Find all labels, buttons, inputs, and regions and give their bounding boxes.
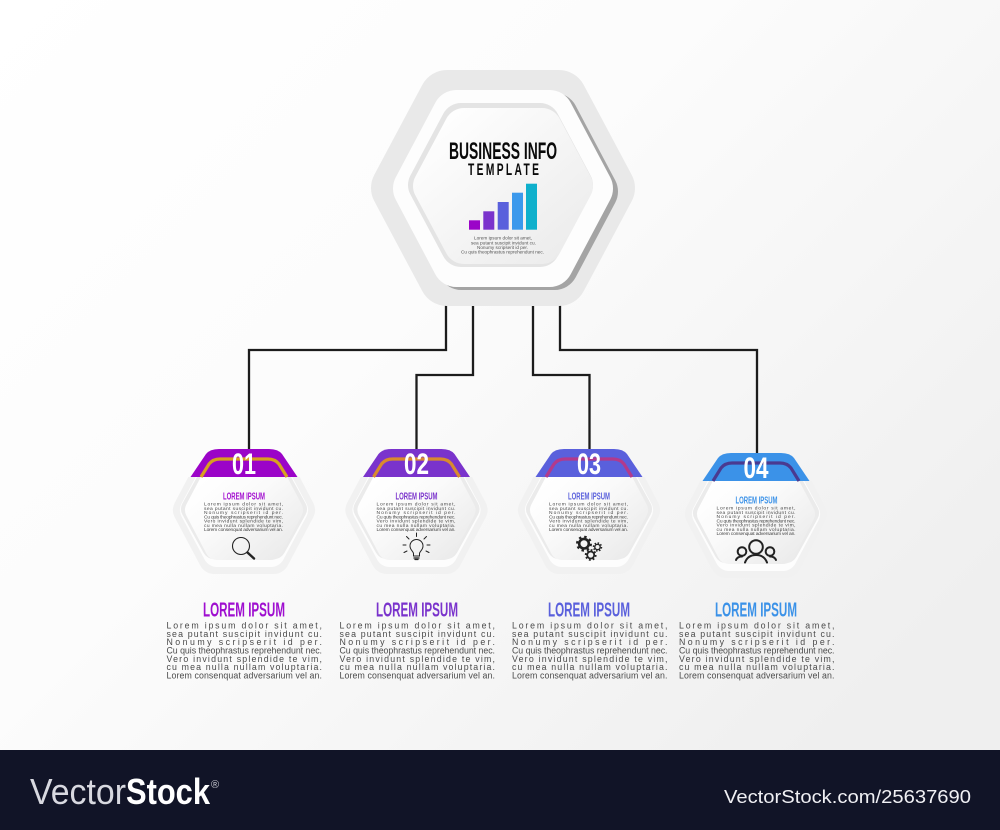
column 04 text: Vero invidunt splendide te vim, — [679, 654, 834, 664]
footer logo: Vector — [30, 771, 126, 812]
number 04: 04 — [744, 452, 769, 485]
icon: people — [736, 540, 776, 562]
hexagon 03 — [534, 462, 644, 558]
column 01 text: Cu quis theophrastus reprehendunt nec. — [166, 646, 322, 656]
column 03 text: Lorem ipsum dolor sit amet, — [512, 620, 668, 630]
central text block: sea putant suscipit invidunt cu. — [471, 240, 536, 246]
mini text 04: Cu quis theophrastus reprehendunt nec. — [716, 518, 796, 524]
mini text 04: Lorem consenquat adversarium vel an. — [716, 531, 796, 537]
mini text 02 — [376, 502, 456, 533]
mini text 02: Cu quis theophrastus reprehendunt nec. — [376, 514, 456, 520]
column 04 heading: LOREM IPSUM — [715, 600, 797, 622]
mini text 03: sea putant suscipit invidunt cu. — [549, 506, 628, 512]
mini text 02: cu mea nulla nullam voluptaria. — [376, 523, 456, 529]
mini text 03: cu mea nulla nullam voluptaria. — [549, 523, 628, 529]
column 03 heading: LOREM IPSUM — [548, 600, 630, 622]
column 01 text: Nonumy scripserit id per. — [166, 637, 322, 647]
number 02: 02 — [404, 448, 429, 481]
tab arc 03 — [546, 459, 632, 477]
bar chart icon — [469, 184, 537, 230]
mini text 04: Nonumy scripserit id per. — [716, 514, 796, 520]
mini text 04: cu mea nulla nullam voluptaria. — [716, 527, 796, 533]
mini text 01: Nonumy scripserit id per. — [204, 510, 283, 516]
panel 03 — [534, 448, 644, 560]
column 02 text — [340, 620, 495, 681]
central text block: Cu quis theophrastus reprehendunt nec. — [461, 249, 544, 255]
tab 01 — [190, 449, 298, 477]
mini text 04: Vero invidunt splendide te vim, — [716, 522, 796, 528]
column 01 text: sea putant suscipit invidunt cu. — [166, 629, 322, 639]
hexagon 02 — [362, 462, 472, 558]
mini text 02: Vero invidunt splendide te vim, — [376, 518, 456, 524]
column 04 text: Lorem ipsum dolor sit amet, — [679, 620, 834, 630]
tab 04 — [702, 453, 810, 481]
mini text 04: sea putant suscipit invidunt cu. — [716, 510, 796, 516]
column 01 text — [166, 620, 322, 681]
column 04 text: Cu quis theophrastus reprehendunt nec. — [679, 646, 834, 656]
mini text 01: Lorem consenquat adversarium vel an. — [204, 527, 283, 533]
column 03 text: Lorem consenquat adversarium vel an. — [512, 671, 668, 681]
tab arc 04 — [713, 463, 799, 481]
hexagon 01 — [189, 462, 299, 558]
mini text 03 — [549, 502, 628, 533]
mini text 01: Cu quis theophrastus reprehendunt nec. — [204, 514, 283, 520]
mini text 01: Lorem ipsum dolor sit amet, — [204, 502, 283, 508]
column 02 text: Lorem ipsum dolor sit amet, — [340, 620, 495, 630]
column 02 text: Nonumy scripserit id per. — [340, 637, 495, 647]
connector lines — [249, 304, 757, 454]
mini heading 04: LOREM IPSUM — [736, 495, 778, 506]
panel 02 — [362, 448, 472, 560]
mini text 01: sea putant suscipit invidunt cu. — [204, 506, 283, 512]
footer logo — [30, 771, 219, 812]
central title: BUSINESS INFO — [449, 138, 557, 165]
central text block: Lorem ipsum dolor sit amet, — [474, 236, 532, 242]
mini text 03: Lorem consenquat adversarium vel an. — [549, 527, 628, 533]
column 01 text: cu mea nulla nullam voluptaria. — [166, 662, 322, 672]
mini text 02: Lorem ipsum dolor sit amet, — [376, 502, 456, 508]
panel 04 — [701, 452, 811, 562]
column 03 text — [512, 620, 668, 681]
hexagon 04 — [701, 466, 811, 562]
column 03 text: cu mea nulla nullam voluptaria. — [512, 662, 668, 672]
column 02 caption — [340, 600, 495, 681]
mini text 02: Nonumy scripserit id per. — [376, 510, 456, 516]
column 02 text: Vero invidunt splendide te vim, — [340, 654, 495, 664]
mini heading 01: LOREM IPSUM — [223, 491, 265, 502]
mini text 01: cu mea nulla nullam voluptaria. — [204, 523, 283, 529]
mini text 01: Vero invidunt splendide te vim, — [204, 518, 283, 524]
column 01 heading: LOREM IPSUM — [203, 600, 285, 622]
central subtitle: TEMPLATE — [468, 161, 539, 179]
tab arc 01 — [201, 459, 287, 477]
mini heading 02: LOREM IPSUM — [396, 491, 438, 502]
icon: light bulb — [403, 533, 430, 560]
column 01 text: Vero invidunt splendide te vim, — [166, 654, 322, 664]
tab arc 02 — [374, 459, 460, 477]
mini text 03: Cu quis theophrastus reprehendunt nec. — [549, 514, 628, 520]
number 01: 01 — [232, 448, 256, 481]
mini text 03: Vero invidunt splendide te vim, — [549, 518, 628, 524]
column 02 text: cu mea nulla nullam voluptaria. — [340, 662, 495, 672]
mini text 03: Lorem ipsum dolor sit amet, — [549, 502, 628, 508]
column 04 text: sea putant suscipit invidunt cu. — [679, 629, 834, 639]
tab 02 — [363, 449, 470, 477]
mini text 02: sea putant suscipit invidunt cu. — [376, 506, 456, 512]
column 02 text: Lorem consenquat adversarium vel an. — [340, 671, 495, 681]
column 03 text: Cu quis theophrastus reprehendunt nec. — [512, 646, 668, 656]
column 04 text — [679, 620, 834, 681]
column 02 heading: LOREM IPSUM — [376, 600, 458, 622]
mini text 03: Nonumy scripserit id per. — [549, 510, 628, 516]
mini text 04 — [716, 506, 796, 537]
number 03: 03 — [577, 448, 601, 481]
central text block: Nonumy scripserit id per. — [477, 245, 528, 251]
column 03 text: Vero invidunt splendide te vim, — [512, 654, 668, 664]
column 04 text: cu mea nulla nullam voluptaria. — [679, 662, 834, 672]
column 02 text: sea putant suscipit invidunt cu. — [340, 629, 495, 639]
column 04 caption — [679, 600, 834, 681]
footer url: VectorStock.com/25637690 — [724, 787, 971, 807]
mini text 04: Lorem ipsum dolor sit amet, — [716, 506, 796, 512]
column 01 text: Lorem ipsum dolor sit amet, — [166, 620, 322, 630]
tab 03 — [536, 449, 642, 477]
footer logo: ® — [211, 779, 219, 791]
column 04 text: Nonumy scripserit id per. — [679, 637, 834, 647]
mini text 02: Lorem consenquat adversarium vel an. — [376, 527, 456, 533]
panel 01 — [189, 448, 299, 558]
central hexagon — [399, 98, 607, 278]
mini heading 03: LOREM IPSUM — [568, 491, 610, 502]
mini text 01 — [204, 502, 283, 533]
column 03 text: Nonumy scripserit id per. — [512, 637, 668, 647]
icon: gears — [577, 537, 602, 560]
column 03 text: sea putant suscipit invidunt cu. — [512, 629, 668, 639]
icon: magnifier — [232, 538, 254, 558]
column 01 caption — [166, 600, 322, 681]
footer logo: Stock — [126, 771, 211, 812]
column 03 caption — [512, 600, 668, 681]
column 02 text: Cu quis theophrastus reprehendunt nec. — [340, 646, 495, 656]
column 01 text: Lorem consenquat adversarium vel an. — [166, 671, 322, 681]
footer bar — [0, 750, 1000, 830]
central text block — [461, 236, 544, 255]
column 04 text: Lorem consenquat adversarium vel an. — [679, 671, 834, 681]
